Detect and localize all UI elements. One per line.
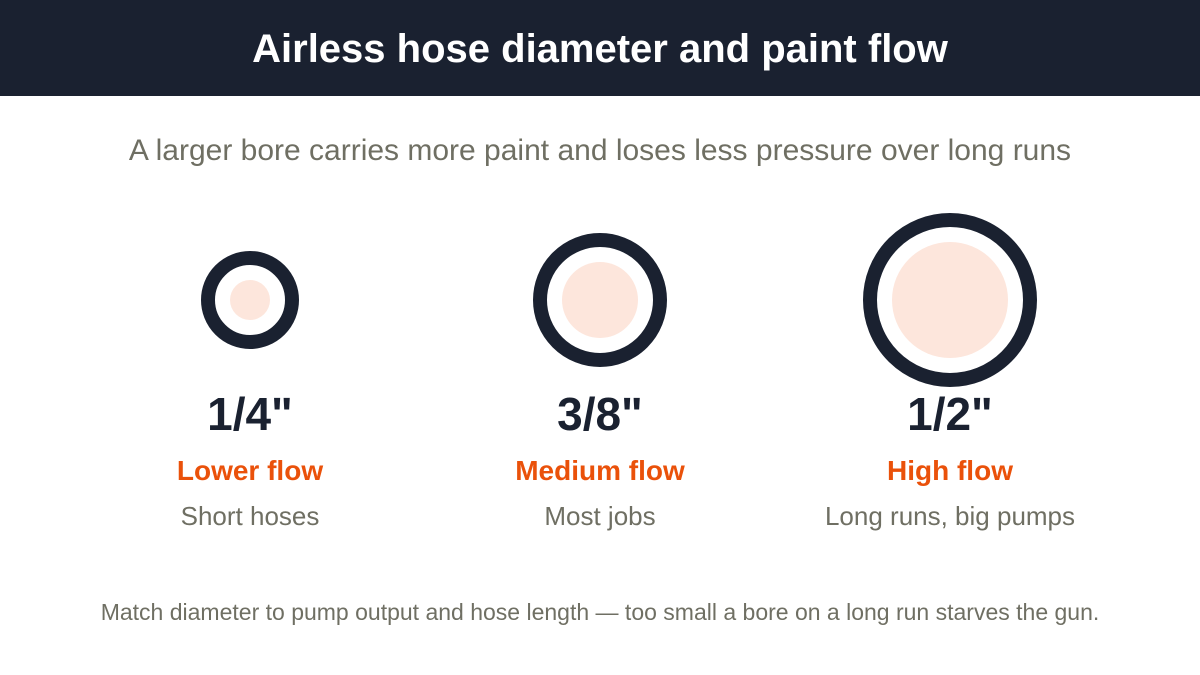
flow label: medium: Medium flow — [515, 455, 685, 486]
flow label: lower: Lower flow — [177, 455, 323, 486]
use case: long runs, big pumps: Long runs, big pumps — [825, 501, 1075, 531]
icon: 1/4 inch hose cross-section — [208, 258, 292, 342]
subtitle: A larger bore carries more paint and loses less pressure over long runs — [129, 134, 1071, 167]
title banner — [0, 0, 1200, 96]
icon: 3/8 inch hose cross-section — [540, 240, 660, 360]
footnote: Match diameter to pump output and hose length — too small a bore on a long run starves the gun. — [101, 599, 1099, 625]
use case: most jobs: Most jobs — [544, 501, 656, 531]
panel: 1/4 inch hose — [177, 258, 323, 531]
use case: short hoses: Short hoses — [181, 501, 319, 531]
panel: 1/2 inch hose — [825, 220, 1075, 531]
title: Airless hose diameter and paint flow — [252, 27, 949, 71]
flow label: high: High flow — [887, 455, 1013, 486]
panel: 3/8 inch hose — [515, 240, 685, 531]
size label: 1/4 inch: 1/4" — [207, 388, 293, 440]
size label: 1/2 inch: 1/2" — [907, 388, 993, 440]
icon: 1/2 inch hose cross-section — [870, 220, 1030, 380]
size label: 3/8 inch: 3/8" — [557, 388, 643, 440]
